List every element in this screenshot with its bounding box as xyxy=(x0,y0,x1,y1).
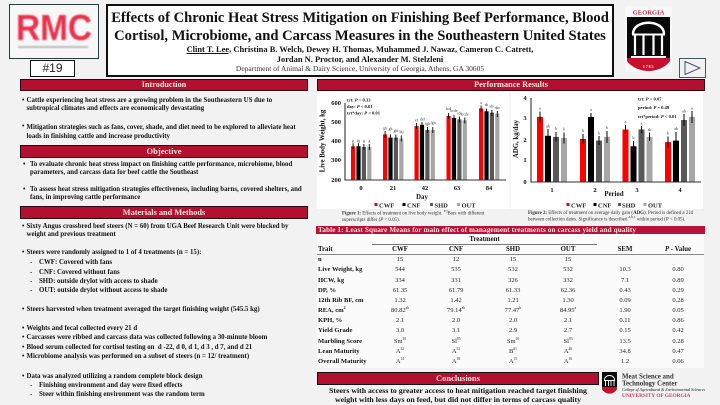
chart: average daily gain: 3 xyxy=(635,187,639,194)
chart: live body weight: day: P < 0.01 xyxy=(347,104,373,109)
text block: materials and methods: Weights and fecal collected every 21 d xyxy=(26,325,137,332)
chart: live body weight: OUT xyxy=(462,202,476,210)
caption: figure 1: superscripts differ (P < 0.05). xyxy=(342,218,400,223)
table rows: 332 xyxy=(563,277,573,284)
chart: average daily gain: CWF xyxy=(571,202,586,210)
chart: average daily gain: ab xyxy=(682,108,686,114)
chart: average daily gain: 1 xyxy=(550,187,554,194)
text block: materials and methods: • xyxy=(22,306,24,313)
text block: conclusions xyxy=(329,386,587,404)
chart: live body weight: Live Body Weight, kg xyxy=(320,109,326,172)
heading: Performance Results xyxy=(317,79,705,91)
chart: live body weight: Day xyxy=(416,194,428,201)
chart: live body weight: bcde xyxy=(450,109,458,113)
table rows: 331 xyxy=(451,277,461,284)
table rows: 3.0 xyxy=(396,327,404,334)
table rows: 0.28 xyxy=(672,297,684,304)
chart: average daily gain xyxy=(510,92,701,210)
text block: materials and methods: Carcasses were ribbed and carcass data was collected following a 30-minute bloom xyxy=(26,334,267,341)
chart: average daily gain: ab xyxy=(546,124,550,128)
table rows: 80.82ab xyxy=(391,306,409,314)
table: carcass yield and quality xyxy=(317,234,704,368)
table rows: 1.42 xyxy=(450,297,462,304)
caption: figure 1 xyxy=(342,209,484,223)
chart: average daily gain: a xyxy=(590,107,592,112)
chart: average daily gain: a xyxy=(641,120,643,126)
logo: RMC xyxy=(9,4,99,59)
table rows: 13.5 xyxy=(619,338,631,345)
table rows: A14 xyxy=(396,357,404,365)
text block: materials and methods: • xyxy=(22,223,24,230)
logo: Meat Science and Technology Center: Technology Center xyxy=(622,380,677,388)
panel: charts background xyxy=(317,92,703,209)
table rows: Sm10 xyxy=(394,337,406,345)
table rows: A52 xyxy=(452,347,460,355)
chart: live body weight: fgh xyxy=(425,122,430,126)
heading: Objective xyxy=(20,145,308,158)
text block: objective: fans, in improving cattle performance xyxy=(30,194,140,201)
text block: materials and methods: CWF: Covered with fans xyxy=(39,259,112,266)
table header: SHD xyxy=(506,246,520,253)
chart: average daily gain: ADG, kg/day xyxy=(513,119,520,158)
authors: Clint T. Lee, Christina B. Welch, Dewey H. Thomas, Muhammed J. Nawaz, Cameron C. Catrett, xyxy=(187,44,533,54)
heading: Introduction: Introduction xyxy=(142,80,186,89)
chart: live body weight: CWF xyxy=(379,202,394,210)
chart: average daily gain: 4 xyxy=(678,187,682,194)
chart: live body weight: 63 xyxy=(454,185,461,192)
table rows: 1.32 xyxy=(394,297,406,304)
table rows: 2.0 xyxy=(509,317,517,324)
text block: materials and methods: - xyxy=(30,269,32,276)
text block: introduction: subtropical climates and effects are economically devastating xyxy=(26,105,204,112)
text block: materials and methods: SHD: outside drylot with access to shade xyxy=(39,278,158,285)
caption: figure 1: Figure 1: Effects of treatment on live body weight. a-j Bars with different xyxy=(342,209,484,217)
text block: materials and methods: - xyxy=(30,287,32,294)
chart: live body weight: ef xyxy=(415,118,419,122)
text block: materials and methods: - xyxy=(30,382,32,389)
table rows: 532 xyxy=(508,266,518,273)
table rows: 62.36 xyxy=(561,287,575,294)
chart: average daily gain: 0 xyxy=(523,179,527,186)
table rows: 2.1 xyxy=(396,317,404,324)
table rows: REA, cm2 xyxy=(318,305,346,314)
chart: live body weight: def xyxy=(420,118,426,122)
table rows: A46 xyxy=(564,347,572,355)
caption: figure 2: Figure 2: Effects of treatment on average daily gain (ADG). Period is defined a 21d xyxy=(528,211,693,216)
chart: live body weight: 300 xyxy=(331,157,341,164)
text block: materials and methods: Data was analyzed utilizing a random complete block design xyxy=(26,373,203,380)
title: Effects of Chronic Heat Stress Mitigation on Finishing Beef Performance, Blood xyxy=(111,10,609,26)
table rows: 0.89 xyxy=(672,277,684,284)
chart: live body weight: SHD xyxy=(434,202,448,210)
text block: objective xyxy=(23,161,302,201)
chart: live body weight: ghi xyxy=(394,129,398,133)
chart: average daily gain: b xyxy=(582,128,584,133)
text block: introduction: • xyxy=(22,97,24,104)
table rows: 0.09 xyxy=(619,297,631,304)
poster number badge: #19 xyxy=(42,61,63,75)
caption: figure 2: between collection dates. Significance is described a,b,c within period (P < 0.05). xyxy=(528,215,685,223)
table rows: A15 xyxy=(509,357,517,365)
logo: Meat Science and Technology Center: Meat Science and xyxy=(622,374,674,380)
chart: average daily gain: trt: P = 0.07 xyxy=(638,96,662,102)
table header xyxy=(318,236,691,253)
heading: Materials and Methods xyxy=(20,206,308,219)
chart: live body weight: fg xyxy=(357,139,360,143)
chart: live body weight: 500 xyxy=(331,119,341,126)
table rows: Marbling Score xyxy=(318,338,362,345)
text block: materials and methods: Microbiome analysis was performed on a subset of steers (n = 12/ treatment) xyxy=(26,353,249,360)
heading: Conclusions: Conclusions xyxy=(436,372,480,382)
logo: University of Georgia: 1785 xyxy=(643,64,654,69)
table header: P - Value xyxy=(665,246,691,253)
table rows: Overall Maturity xyxy=(318,358,367,365)
chart: live body weight: 400 xyxy=(331,138,341,145)
text block: materials and methods: Steers harvested when treatment averaged the target finishing weight (545.5 kg) xyxy=(26,306,260,313)
chart: average daily gain: b xyxy=(606,125,608,130)
chart: average daily gain: b xyxy=(555,126,557,131)
chart: live body weight: a xyxy=(480,101,482,105)
table rows: Sl93 xyxy=(563,337,572,345)
text block: materials and methods: • xyxy=(22,353,24,360)
text block: materials and methods: Finishing environment and day were fixed effects xyxy=(39,382,182,389)
table header: CNF xyxy=(449,246,463,253)
chart: average daily gain: b xyxy=(667,130,669,136)
chart: average daily gain: b xyxy=(632,135,634,140)
table header: Trait xyxy=(318,246,333,253)
table rows: Live Weight, kg xyxy=(318,266,362,273)
text block: introduction: • xyxy=(22,123,24,130)
chart: average daily gain: a xyxy=(691,106,693,110)
chart: live body weight: ab xyxy=(485,103,488,107)
heading: Introduction xyxy=(20,79,308,91)
text block: introduction: Mitigation strategies such as fans, cover, shade, and diet need to be explored to alleviate heat xyxy=(26,124,296,131)
table rows: 2.7 xyxy=(564,327,572,334)
table header: OUT xyxy=(561,246,575,253)
text block: objective: To assess heat stress mitigation strategies effectiveness, including barns, covered shelters, and xyxy=(30,186,302,193)
table rows: 77.47b xyxy=(505,306,521,314)
table rows: n xyxy=(318,256,322,263)
text block: materials and methods: Steers were randomly assigned to 1 of 4 treatments (n = 15): xyxy=(26,249,201,256)
poster number badge xyxy=(30,60,75,77)
table rows: A18 xyxy=(452,357,460,365)
chart: live body weight xyxy=(320,98,506,210)
chart: average daily gain: OUT xyxy=(648,202,663,210)
text block: materials and methods: OUT: outside drylot without access to shade xyxy=(39,287,167,294)
chart: live body weight: fgh xyxy=(430,121,436,125)
table rows: 0.28 xyxy=(672,338,684,345)
text block: materials and methods: • xyxy=(22,373,24,380)
chart: average daily gain: b xyxy=(598,130,600,136)
table rows: 79.14ab xyxy=(447,306,465,314)
chart: live body weight: abc xyxy=(489,104,495,108)
table rows: 61.33 xyxy=(506,287,520,294)
chart: average daily gain: a xyxy=(539,106,541,110)
table rows: 15 xyxy=(397,256,403,263)
chart: live body weight: trt*day: P < 0.01 xyxy=(347,110,381,116)
table rows: 10.3 xyxy=(619,266,631,273)
table rows: Lean Maturity xyxy=(318,348,360,355)
chart: average daily gain: ab xyxy=(648,127,651,132)
table rows: 0.47 xyxy=(672,348,684,355)
chart: live body weight: g xyxy=(369,139,371,143)
chart: average daily gain: ab xyxy=(674,126,678,131)
chart: live body weight: g xyxy=(352,139,354,143)
text block: materials and methods: CNF: Covered without fans xyxy=(39,269,120,276)
text block: introduction: loads in finishing cattle and increase productivity xyxy=(26,133,170,140)
table rows: 7.1 xyxy=(621,277,629,284)
table header: Treatment xyxy=(469,236,500,243)
text block: conclusions: weight with less days on feed, but did not differ in terms of carcass quality xyxy=(335,394,581,404)
table rows: B61 xyxy=(509,347,517,355)
logo: Meat Science and Technology Center: College of Agricultural & Environmental Sciences xyxy=(622,387,706,392)
table header: CWF xyxy=(392,246,408,253)
heading: Objective: Objective xyxy=(147,146,181,156)
table rows: 535 xyxy=(451,266,461,273)
text block: materials and methods: • xyxy=(22,325,24,332)
table rows: 2.0 xyxy=(452,317,460,324)
heading: Conclusions xyxy=(317,372,599,384)
table rows: 334 xyxy=(395,277,405,284)
table rows: 0.15 xyxy=(619,327,631,334)
chart: live body weight: gh xyxy=(389,127,392,131)
text block: materials and methods: - xyxy=(30,278,32,285)
chart: live body weight: 42 xyxy=(422,185,428,192)
table rows xyxy=(318,256,684,365)
chart: live body weight: trt: P = 0.33 xyxy=(347,98,371,102)
table rows: 0.05 xyxy=(672,307,684,314)
text block: materials and methods: • xyxy=(22,344,24,351)
table rows: 1.2 xyxy=(621,358,629,365)
affiliation: Department of Animal & Dairy Science, University of Georgia, Athens, GA 30605 xyxy=(236,64,484,73)
chart: average daily gain: period: P = 0.49 xyxy=(638,105,670,110)
logo: Meat Science and Technology Center xyxy=(602,372,706,398)
table rows: 532 xyxy=(563,266,573,273)
table rows: 0.43 xyxy=(619,287,631,294)
text block: materials and methods: • xyxy=(22,334,24,341)
table rows: 2.9 xyxy=(509,327,517,334)
logo: University of Georgia: GEORGIA xyxy=(633,10,665,16)
text block: materials and methods: - xyxy=(30,391,32,398)
text block: objective: • xyxy=(23,186,25,193)
text block: materials and methods: Sixty Angus crossbred beef steers (N = 60) from UGA Beef Research Unit were blocked by xyxy=(26,223,288,230)
table rows: A16 xyxy=(564,357,572,365)
text block: materials and methods: weight and previous treatment xyxy=(26,231,116,238)
text block: objective: • xyxy=(23,161,25,168)
text block: introduction: Cattle experiencing heat stress are a growing problem in the Southeastern US due to xyxy=(26,97,272,104)
table rows: KPH, % xyxy=(318,317,342,324)
chart: average daily gain: 4 xyxy=(523,95,527,102)
table rows: DP, % xyxy=(318,287,336,294)
table rows: 326 xyxy=(508,277,518,284)
chart: average daily gain: SHD xyxy=(622,202,636,210)
authors xyxy=(186,44,533,64)
chart: average daily gain: CNF xyxy=(598,202,611,210)
table rows: Sl95 xyxy=(451,337,460,345)
text block: objective: parameters, and carcass data for beef cattle the Southeast xyxy=(30,169,198,176)
icon: play button xyxy=(679,58,706,78)
chart: live body weight: g xyxy=(363,139,365,143)
text block: conclusions: Steers with access to greater access to heat mitigation reached target finishing xyxy=(329,386,587,394)
text block: introduction xyxy=(22,97,296,140)
table rows: 3.1 xyxy=(452,327,460,334)
chart: average daily gain: 2 xyxy=(523,137,527,144)
table rows: 0.11 xyxy=(619,317,631,324)
table rows: 0.86 xyxy=(672,317,684,324)
chart: live body weight: 200 xyxy=(331,177,341,184)
chart: live body weight: 21 xyxy=(390,185,396,192)
table rows: Yield Grade xyxy=(318,327,352,334)
chart: live body weight: CNF xyxy=(407,202,420,210)
text block: materials and methods xyxy=(22,222,288,398)
table rows: 0.80 xyxy=(672,266,684,273)
chart: live body weight: hij xyxy=(399,130,404,134)
logo: University of Georgia xyxy=(627,10,670,71)
table rows: 12 xyxy=(453,256,459,263)
text block: materials and methods: - xyxy=(30,259,32,266)
chart: average daily gain: 2 xyxy=(593,187,597,194)
authors: Jordan N. Proctor, and Alexander M. Stelzleni xyxy=(277,54,443,64)
chart: live body weight: abc xyxy=(495,106,500,110)
text block: objective: To evaluate chronic heat stress impact on finishing cattle performance, microbiome, blood xyxy=(30,161,292,168)
text block: materials and methods: • xyxy=(22,249,24,256)
title block xyxy=(106,4,614,77)
heading: table title: Table 1: Least Square Means for main effect of management treatments on carcass yield and quality xyxy=(318,226,636,234)
table rows: 34.8 xyxy=(619,348,631,355)
chart: average daily gain: b xyxy=(563,126,565,132)
table rows: A32 xyxy=(396,347,404,355)
text block: materials and methods: Steer within finishing environment was the random term xyxy=(39,391,205,398)
chart: live body weight: 600 xyxy=(331,100,341,107)
table rows: 15 xyxy=(565,256,571,263)
caption: figure 2 xyxy=(528,210,693,223)
chart: average daily gain: Period xyxy=(604,191,624,198)
title xyxy=(111,10,609,44)
chart: live body weight: 0 xyxy=(359,185,363,192)
heading: Materials and Methods: Materials and Methods xyxy=(123,208,205,217)
chart: live body weight: 84 xyxy=(486,185,493,192)
text block: materials and methods: Blood serum collected for cortisol testing on d -22, d 0, d 1, d 3 , d 7, and d 21 xyxy=(26,344,252,351)
table rows: 0.42 xyxy=(672,327,684,334)
table rows: 15 xyxy=(510,256,516,263)
table rows: 61.79 xyxy=(449,287,463,294)
table rows: 544 xyxy=(395,266,405,273)
table rows: 0.29 xyxy=(672,287,684,294)
table rows: 2.1 xyxy=(564,317,572,324)
table rows: Sm10 xyxy=(507,337,519,345)
chart: average daily gain: 1 xyxy=(523,157,527,164)
table header: SEM xyxy=(618,246,632,253)
table rows: 0.06 xyxy=(672,358,684,365)
table rows: 1.30 xyxy=(562,297,574,304)
chart: average daily gain: a xyxy=(625,119,627,124)
chart: average daily gain: trt*period: P < 0.01 xyxy=(638,114,677,119)
logo: RMC: RMC xyxy=(16,7,92,48)
title: Cortisol, Microbiome, and Carcass Measures in the Southeastern United States xyxy=(114,28,606,44)
table rows: 1.21 xyxy=(507,297,519,304)
table rows: 1.90 xyxy=(619,307,631,314)
table rows: HCW, kg xyxy=(318,277,344,284)
chart: live body weight: bcd xyxy=(446,107,451,111)
chart: live body weight: bcde xyxy=(461,112,469,116)
chart: average daily gain: 3 xyxy=(523,115,527,122)
chart: live body weight: cde xyxy=(457,112,462,116)
table rows: 12th Rib BF, cm xyxy=(318,297,364,304)
table rows: 61.35 xyxy=(393,287,407,294)
heading: Performance Results: Performance Results xyxy=(474,80,548,89)
table rows: 84.95a xyxy=(560,306,576,314)
chart: live body weight: gh xyxy=(383,126,387,130)
